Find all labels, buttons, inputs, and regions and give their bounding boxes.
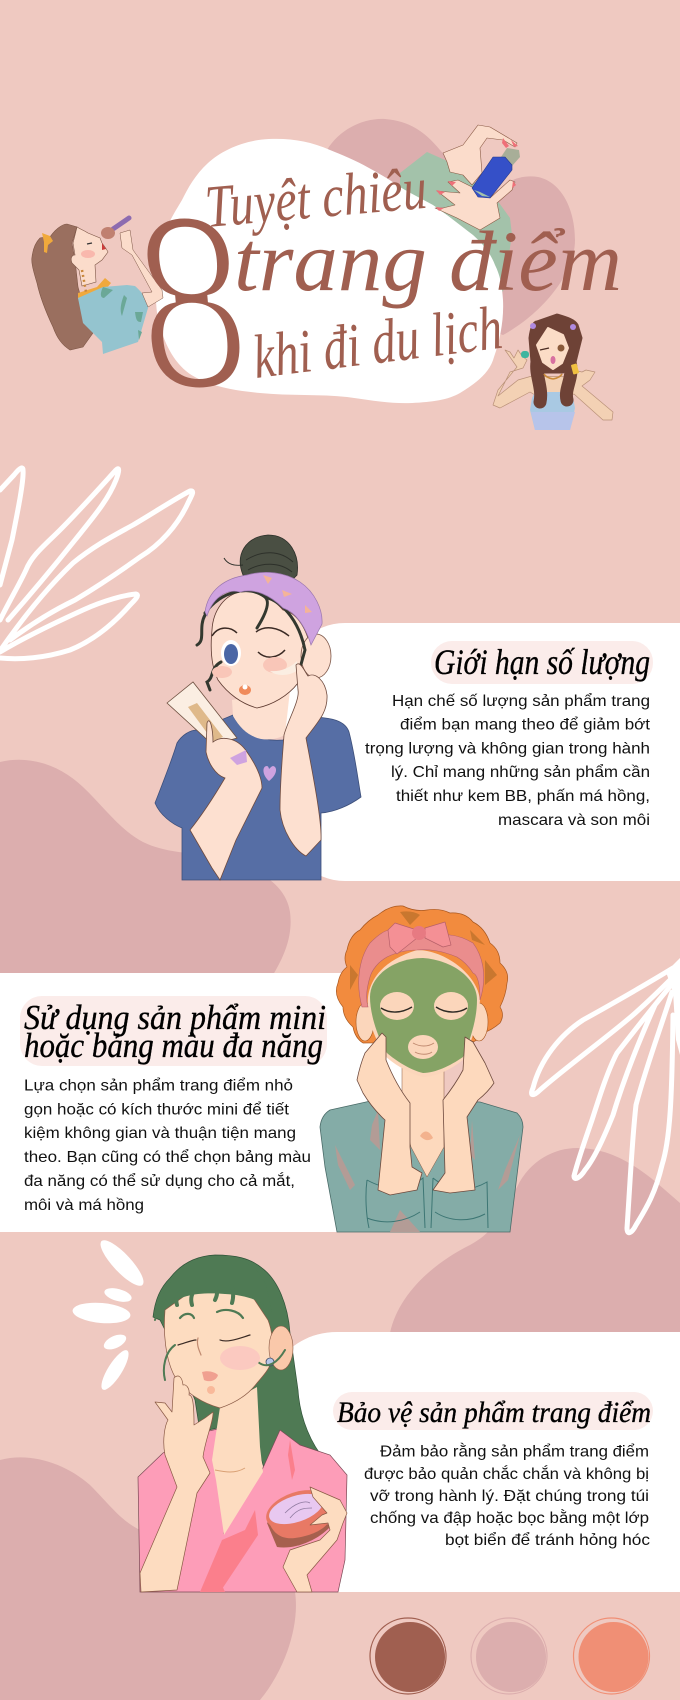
tube [167, 682, 237, 745]
background blob: bottom left [0, 1457, 296, 1700]
panel 2 body text [24, 1077, 311, 1214]
panel 2 heading [24, 998, 326, 1065]
background blob: right middle [390, 1148, 680, 1333]
panel 2: mini products [0, 906, 523, 1232]
shirt [138, 1428, 347, 1592]
right hand and arm [433, 1037, 494, 1193]
face [164, 1292, 273, 1408]
panel 2 body text: đa năng có thể sử dụng cho cả mắt, [24, 1171, 295, 1190]
panel 1: limit quantity [155, 535, 680, 881]
panel 3: protect products [138, 1255, 680, 1592]
panel 1 body text: Hạn chế số lượng sản phẩm trang [392, 692, 650, 710]
icon: girl applying blush [32, 218, 163, 354]
face [211, 592, 310, 708]
eye patches and lips [380, 992, 468, 1059]
face [537, 328, 568, 379]
decoration: top left white leaves [0, 468, 193, 659]
title line: Tuyệt chiêu: Tuyệt chiêu [202, 155, 429, 240]
bun [224, 535, 298, 582]
cheeks, cream and lips [212, 657, 298, 695]
eyes and brows [212, 628, 289, 666]
panel 3 white card [275, 1332, 680, 1592]
panel 2 body text: môi và má hồng [24, 1197, 144, 1214]
swatch: coral [574, 1618, 650, 1694]
hair strands [197, 591, 305, 690]
panel 3 body text: được bảo quản chắc chắn và không bị [364, 1464, 649, 1483]
background blob: left middle [0, 760, 291, 975]
arm [120, 230, 163, 307]
ponytail hair [32, 224, 93, 350]
hand raised to cheek [280, 664, 327, 856]
arms and chest [493, 350, 613, 420]
shirt [78, 285, 148, 354]
header graphic [32, 119, 622, 443]
decoration: white sparkle burst [72, 1235, 149, 1393]
headband [359, 930, 484, 1007]
bow [388, 922, 451, 954]
cheek and lips [202, 1346, 260, 1394]
neck and chest [402, 1068, 444, 1177]
green cloth [400, 152, 512, 292]
brush [101, 218, 129, 239]
scrunchie [42, 233, 53, 253]
face skin [368, 950, 480, 1077]
icon: girl with braids [493, 315, 613, 430]
held items [521, 323, 579, 375]
shirt [320, 1100, 523, 1232]
cuffs [366, 1178, 488, 1228]
hand at cheek [140, 1376, 213, 1592]
panel 3 body text: bọt biển để tránh hỏng hóc [445, 1531, 650, 1549]
panel 2 heading pill [20, 996, 327, 1066]
green mask [370, 958, 477, 1073]
bottle cap [501, 148, 520, 166]
braids [537, 362, 571, 402]
hair top and bangs [155, 1256, 285, 1380]
panel 3 body text: vỡ trong hành lý. Đặt chúng trong túi [370, 1488, 649, 1505]
title line: trang điểm: trang điểm [234, 213, 622, 309]
header dark heart blob [327, 119, 575, 335]
illustration: girl with green face mask [320, 906, 523, 1232]
panel 2 body text: theo. Bạn cũng có thể chọn bảng màu [24, 1148, 311, 1166]
swatch: dusty pink [471, 1618, 547, 1694]
panel 2 heading: Sử dụng sản phẩm mini [24, 998, 326, 1037]
panel 1 body text [365, 692, 651, 829]
ears [356, 1003, 488, 1041]
title line: khi đi du lịch: khi đi du lịch [249, 294, 506, 392]
panel 3 heading pill [333, 1392, 653, 1430]
panel 1 body text: điểm bạn mang theo để giảm bớt [400, 716, 651, 734]
left hand and arm [357, 1033, 422, 1195]
illustration: girl with green hair and cream jar [138, 1255, 347, 1592]
neck [212, 1387, 263, 1535]
collar [78, 278, 111, 299]
panel 1 body text: thiết như kem BB, phấn má hồng, [396, 788, 650, 805]
panel 3 heading: Bảo vệ sản phẩm trang điểm [337, 1396, 651, 1429]
face [71, 227, 108, 292]
icon: hands with blue bottle [435, 125, 520, 230]
panel 1 body text: trọng lượng và không gian trong hành [365, 740, 650, 758]
panel 3 body text: chống va đập hoặc bọc bằng một lớp [370, 1508, 649, 1527]
upper hand [443, 125, 518, 185]
panel 2 body text: kiệm không gian và thuận tiện mang [24, 1125, 296, 1142]
shirt [155, 715, 361, 880]
hair back [153, 1255, 325, 1476]
cream jar [261, 1483, 335, 1548]
panel 2 heading: hoặc bảng màu đa năng [24, 1026, 323, 1065]
panel 3 body text [364, 1442, 650, 1549]
hand holding jar [283, 1487, 347, 1592]
panel 1 body text: lý. Chỉ mang những sản phẩm cần [391, 763, 650, 781]
lower hand [435, 180, 516, 230]
hand holding tube [190, 721, 262, 880]
header white blob [156, 139, 503, 403]
orange hair [336, 906, 508, 1043]
bottle [472, 157, 512, 198]
hair [530, 315, 581, 372]
ear and earring [266, 1326, 293, 1370]
decoration: right white leaves [532, 958, 680, 1233]
ear [301, 634, 331, 678]
title number 8: 8 [124, 164, 260, 443]
panel 1 heading pill [431, 641, 653, 684]
swatch: brown [370, 1618, 446, 1694]
eyes and brows [178, 1310, 250, 1355]
panel 1 white card [285, 623, 680, 881]
colour palette circles [370, 1618, 650, 1694]
panel 3 body text: Đảm bảo rằng sản phẩm trang điểm [380, 1442, 649, 1461]
neck [232, 690, 290, 739]
panel 2 body text: Lựa chọn sản phẩm trang điểm nhỏ [24, 1077, 293, 1095]
shirt heart [263, 766, 276, 781]
panel 2 body text: gọn hoặc có kích thước mini để tiết [24, 1100, 290, 1118]
illustration: girl with purple headband and tube [155, 535, 361, 880]
panel 2 white card [0, 973, 402, 1232]
headband [205, 572, 322, 645]
top [530, 392, 575, 430]
panel 1 body text: mascara và son môi [498, 812, 650, 829]
